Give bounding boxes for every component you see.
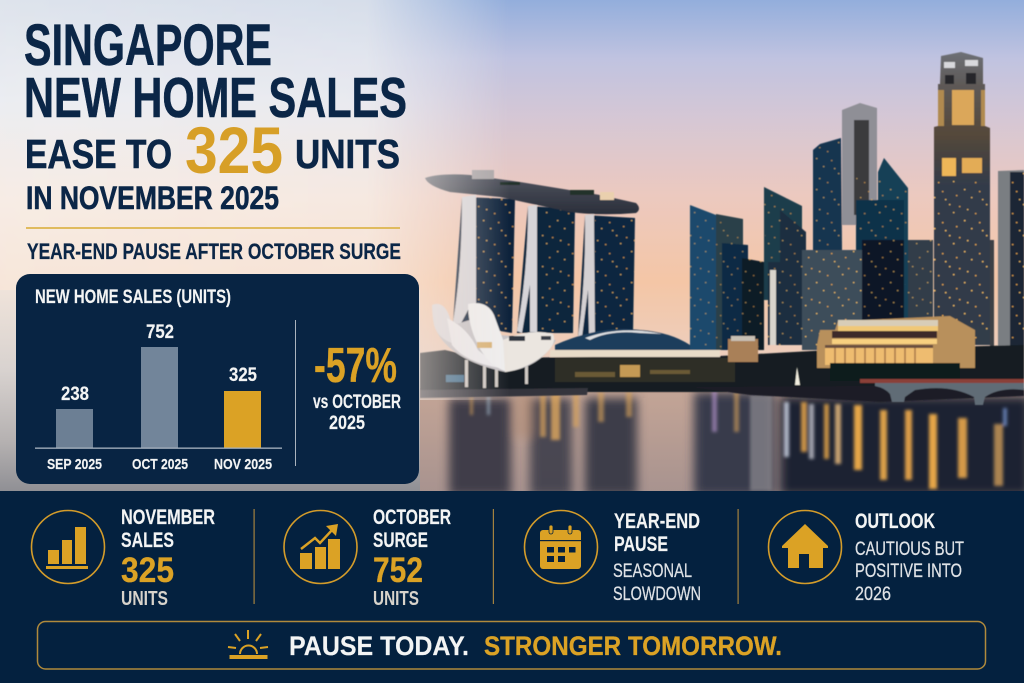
divider 3 bbox=[738, 509, 739, 604]
left tower cluster bbox=[690, 205, 764, 350]
description second line: POSITIVE INTO bbox=[855, 561, 962, 582]
title word: Units: UNITS bbox=[295, 131, 400, 177]
change caption year: 2025 bbox=[329, 413, 365, 434]
axis label: Oct 2025: OCT 2025 bbox=[132, 456, 188, 473]
value: 752: 752 bbox=[146, 322, 174, 343]
unit: UNITS bbox=[373, 588, 419, 610]
description: SEASONAL bbox=[613, 561, 692, 582]
chart axis bbox=[35, 448, 282, 449]
hotel towers bbox=[453, 195, 635, 337]
panel: new home sales chart bbox=[16, 274, 419, 484]
label second line: SURGE bbox=[373, 529, 428, 552]
icon: sunrise bbox=[228, 630, 268, 658]
subtitle: YEAR-END PAUSE AFTER OCTOBER SURGE bbox=[27, 239, 401, 264]
bar: Oct 2025 bbox=[141, 347, 178, 448]
ArtScience Museum bbox=[432, 303, 556, 388]
stat: year-end pause bbox=[524, 510, 701, 605]
stat: outlook bbox=[768, 510, 964, 605]
icon: bar chart bbox=[32, 510, 104, 584]
background photo: Marina Bay skyline at dusk bbox=[0, 0, 1024, 496]
label: NOVEMBER bbox=[121, 506, 215, 529]
label second line: PAUSE bbox=[614, 533, 668, 556]
change caption: vs OCTOBER bbox=[313, 392, 401, 413]
number: 325 bbox=[121, 551, 174, 590]
bridge bbox=[860, 379, 1024, 405]
icon: calendar bbox=[524, 510, 598, 584]
description: CAUTIOUS BUT bbox=[855, 539, 964, 560]
right edge tower bbox=[998, 170, 1024, 355]
divider 2 bbox=[493, 509, 494, 604]
icon: rising chart bbox=[284, 510, 357, 584]
bar chart bbox=[35, 322, 282, 473]
title line: In November 2025: IN NOVEMBER 2025 bbox=[26, 180, 279, 216]
slogan: pause today: PAUSE TODAY. bbox=[289, 631, 469, 661]
sky bbox=[0, 0, 1024, 392]
city skyline towers bbox=[690, 52, 1024, 355]
bar: Nov 2025 bbox=[224, 391, 261, 448]
title line: New Home Sales: NEW HOME SALES bbox=[24, 66, 407, 130]
UOB tower bbox=[934, 52, 994, 346]
change figure: -57% bbox=[314, 339, 397, 393]
panel divider bbox=[295, 320, 296, 466]
left light fade over photo bbox=[0, 0, 510, 400]
mid towers bbox=[764, 103, 933, 350]
band background bbox=[0, 491, 1024, 683]
Marina Bay Sands bbox=[425, 170, 639, 337]
panel background bbox=[16, 274, 419, 484]
bottom band bbox=[0, 491, 1024, 683]
Fullerton building bbox=[728, 316, 975, 385]
SkyPark deck bbox=[425, 174, 639, 214]
label: OCTOBER bbox=[373, 506, 451, 529]
number: 752 bbox=[373, 551, 423, 590]
label second line: SALES bbox=[121, 529, 174, 552]
description second line: SLOWDOWN bbox=[613, 584, 701, 605]
label: YEAR-END bbox=[614, 510, 700, 533]
slogan: stronger tomorrow: STRONGER TOMORROW. bbox=[484, 631, 782, 661]
title line: Singapore: SINGAPORE bbox=[24, 13, 272, 78]
slogan banner bbox=[38, 622, 986, 669]
icon: house bbox=[768, 510, 842, 584]
value: 238: 238 bbox=[61, 384, 89, 405]
bar: Sep 2025 bbox=[56, 409, 93, 448]
left lower fade bbox=[0, 290, 420, 492]
title block bbox=[24, 13, 407, 216]
unit: UNITS bbox=[121, 588, 168, 610]
axis label: Sep 2025: SEP 2025 bbox=[47, 456, 102, 473]
value: 325: 325 bbox=[229, 365, 257, 386]
banner frame bbox=[38, 622, 986, 669]
axis label: Nov 2025: NOV 2025 bbox=[214, 456, 272, 473]
headline number 325: 325 bbox=[185, 113, 283, 187]
title line: Ease to: EASE TO bbox=[25, 131, 172, 177]
label: OUTLOOK bbox=[855, 510, 935, 533]
water bbox=[0, 388, 1024, 496]
stat: November sales bbox=[32, 506, 215, 610]
lower promenade, trees and convention centre bbox=[420, 329, 1024, 402]
gold rule bbox=[26, 227, 400, 229]
chart title: NEW HOME SALES (UNITS) bbox=[35, 287, 231, 308]
divider 1 bbox=[254, 509, 255, 604]
description third line: 2026 bbox=[855, 584, 891, 605]
stat: October surge bbox=[284, 506, 451, 610]
